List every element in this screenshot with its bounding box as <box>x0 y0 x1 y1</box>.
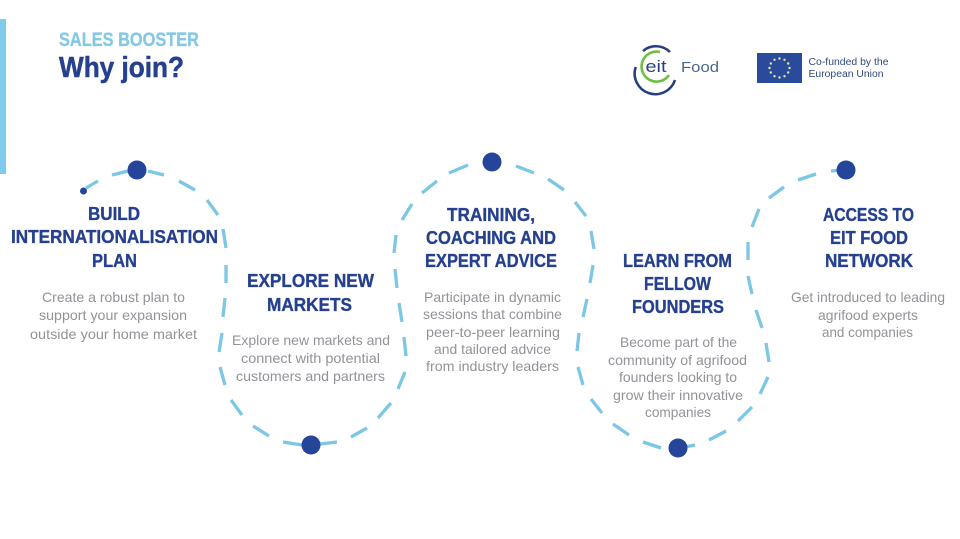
logo: EU co-funded: Co-funded by the <box>808 56 889 68</box>
step 1: build internationalisation plan: BUILD <box>88 203 140 224</box>
step 5: access to EIT Food network: EIT FOOD <box>830 227 908 248</box>
step 5: access to EIT Food network: agrifood experts <box>818 307 918 323</box>
step 3: training, coaching and expert advice: and tailored advice <box>434 341 551 357</box>
step 3: training, coaching and expert advice: sessions that combine <box>423 306 562 322</box>
logo: EIT Food: Food <box>681 59 719 76</box>
step 5: access to EIT Food network <box>791 204 945 340</box>
step 4: learn from fellow founders: community of agrifood <box>608 352 747 368</box>
step 3: training, coaching and expert advice: peer-to-peer learning <box>426 324 560 340</box>
step 2: explore new markets <box>232 270 390 384</box>
step 5: access to EIT Food network: Get introduced to leading <box>791 289 945 305</box>
step 5: access to EIT Food network: and companies <box>822 324 913 340</box>
milestone dot 2 <box>302 436 320 454</box>
step 1: build internationalisation plan: PLAN <box>92 250 137 271</box>
header title: SALES BOOSTER <box>59 30 199 51</box>
path start dot <box>80 188 87 194</box>
milestone dot 5 <box>836 160 856 180</box>
dashed winding path <box>86 165 842 448</box>
logo: EU co-funded: European Union <box>808 68 884 80</box>
milestone dot 3 <box>482 152 502 172</box>
step 2: explore new markets: MARKETS <box>267 294 352 315</box>
step 5: access to EIT Food network: ACCESS TO <box>823 204 914 225</box>
step 1: build internationalisation plan: INTERNATIONALISATION <box>11 226 218 247</box>
logo: EIT Food: eit <box>646 57 667 76</box>
step 3: training, coaching and expert advice: COACHING AND <box>426 227 556 248</box>
step 3: training, coaching and expert advice: TRAINING, <box>447 204 535 225</box>
step 1: build internationalisation plan <box>11 203 218 342</box>
step 1: build internationalisation plan: support your expansion <box>39 307 187 323</box>
step 4: learn from fellow founders: founders looking to <box>619 369 737 385</box>
accent bar <box>0 19 6 174</box>
step 3: training, coaching and expert advice: EXPERT ADVICE <box>425 250 557 271</box>
logo: EU co-funded <box>757 53 889 83</box>
step 4: learn from fellow founders <box>608 250 747 420</box>
step 4: learn from fellow founders: grow their innovative <box>613 387 743 403</box>
milestone dot 4 <box>668 438 688 458</box>
step 2: explore new markets: customers and partners <box>236 368 385 384</box>
step 4: learn from fellow founders: FOUNDERS <box>632 296 724 317</box>
step 3: training, coaching and expert advice: Participate in dynamic <box>424 289 561 305</box>
step 4: learn from fellow founders: Become part of the <box>620 334 737 350</box>
step 3: training, coaching and expert advice: from industry leaders <box>426 358 559 374</box>
milestone dot 1 <box>128 160 146 180</box>
header title <box>59 30 199 84</box>
step 5: access to EIT Food network: NETWORK <box>825 250 914 271</box>
step 2: explore new markets: Explore new markets and <box>232 332 390 348</box>
step 4: learn from fellow founders: companies <box>645 404 711 420</box>
step 3: training, coaching and expert advice <box>423 204 562 374</box>
step 2: explore new markets: connect with potential <box>241 350 380 366</box>
step 2: explore new markets: EXPLORE NEW <box>247 270 374 291</box>
step 1: build internationalisation plan: Create a robust plan to <box>42 289 185 305</box>
logo: EIT Food <box>635 46 719 94</box>
header title: Why join? <box>59 52 184 84</box>
step 4: learn from fellow founders: FELLOW <box>644 273 711 294</box>
step 4: learn from fellow founders: LEARN FROM <box>623 250 732 271</box>
step 1: build internationalisation plan: outside your home market <box>30 326 197 342</box>
